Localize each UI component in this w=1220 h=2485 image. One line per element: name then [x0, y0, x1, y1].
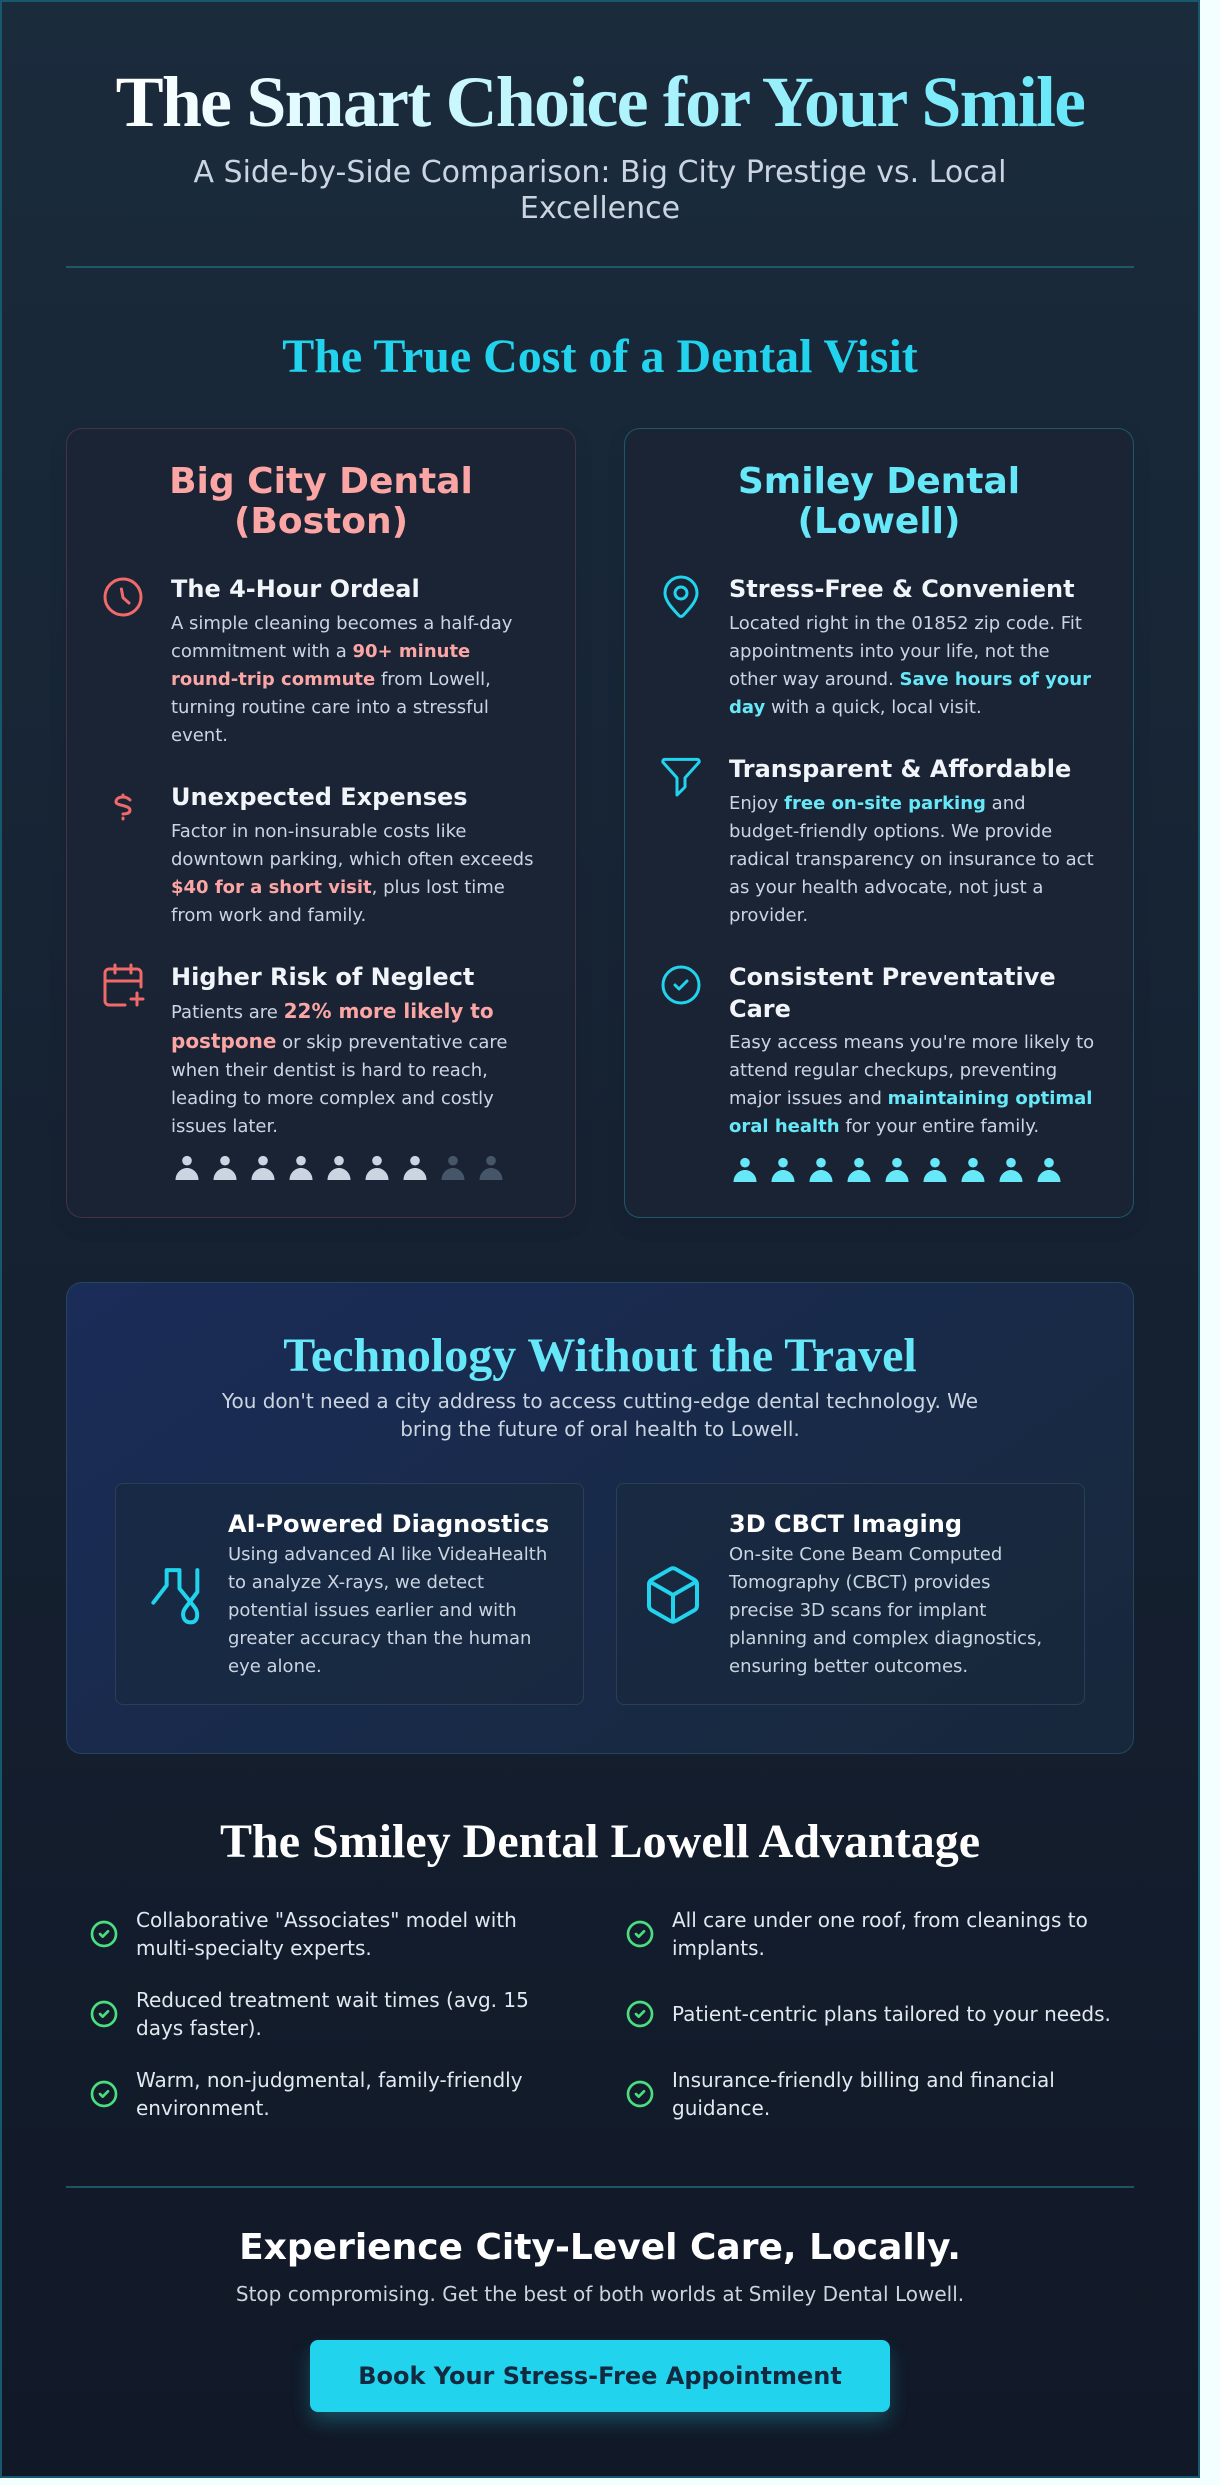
- advantage text 4: Patient-centric plans tailored to your needs.: [672, 2002, 1111, 2026]
- intro text: technology: [222, 1389, 978, 1441]
- advantage text 2: implants.: [672, 1936, 765, 1960]
- heading: advantage: The Smiley Dental Lowell Advantage: [220, 1815, 980, 1868]
- item text: ordeal: turning routine care into a stressful: [171, 697, 489, 718]
- item text: stress-free: other way around. Save hours of your: [729, 669, 1091, 690]
- panel heading: big city: (Boston): [234, 501, 408, 542]
- card text: 3d imaging: Tomography (CBCT) provides: [729, 1572, 990, 1593]
- heading: the true cost: The True Cost of a Dental Visit: [282, 330, 918, 383]
- item title: unexpected expenses: Unexpected Expenses: [171, 783, 468, 811]
- card text: 3d imaging: ensuring better outcomes.: [729, 1656, 968, 1677]
- subtitle: Excellence: [520, 191, 680, 226]
- advantage text 5: Warm, non-judgmental, family-friendly: [136, 2068, 523, 2092]
- item text: neglect: issues later.: [171, 1116, 278, 1137]
- panel: smiley dental: [624, 428, 1134, 1218]
- panel heading: big city: Big City Dental: [169, 461, 473, 502]
- card text: 3d imaging: On-site Cone Beam Computed: [729, 1544, 1002, 1565]
- item title: transparent: Transparent & Affordable: [729, 755, 1071, 783]
- item text: neglect: postpone or skip preventative care: [171, 1029, 507, 1053]
- card text: ai diagnostics: potential issues earlier and with: [228, 1600, 517, 1621]
- card text: ai diagnostics: greater accuracy than the human: [228, 1628, 531, 1649]
- panel: technology: [66, 1282, 1134, 1754]
- advantage text 1: multi-specialty experts.: [136, 1936, 372, 1960]
- card text: ai diagnostics: Using advanced AI like VideaHealth: [228, 1544, 547, 1565]
- advantage text 6: Insurance-friendly billing and financial: [672, 2068, 1055, 2092]
- panel: big city dental: [66, 428, 576, 1218]
- item text: transparent: as your health advocate, not just a: [729, 877, 1043, 898]
- card title: 3d imaging: 3D CBCT Imaging: [729, 1510, 962, 1538]
- cta button: [310, 2340, 890, 2412]
- icon: cube: [647, 1566, 699, 1624]
- item text: expenses: from work and family.: [171, 905, 366, 926]
- advantage text 5: [136, 2068, 523, 2120]
- card title: ai diagnostics: AI-Powered Diagnostics: [228, 1510, 549, 1538]
- cta button: Book Your Stress-Free Appointment: [358, 2362, 842, 2390]
- advantage text 5: environment.: [136, 2096, 270, 2120]
- icon: funnel: [661, 758, 701, 797]
- item title: consistent: Care: [729, 995, 791, 1023]
- card text: ai diagnostics: to analyze X-rays, we detect: [228, 1572, 484, 1593]
- advantage text 1: [136, 1908, 517, 1960]
- item text: transparent: [729, 793, 1094, 926]
- item text: ordeal: round-trip commute from Lowell,: [171, 669, 491, 690]
- advantage text 3: Reduced treatment wait times (avg. 15: [136, 1988, 529, 2012]
- item text: transparent: provider.: [729, 905, 808, 926]
- item text: consistent: major issues and maintaining optimal: [729, 1088, 1092, 1109]
- item title: the 4-hour ordeal: The 4-Hour Ordeal: [171, 575, 420, 603]
- item title: higher risk: Higher Risk of Neglect: [171, 963, 474, 991]
- item title: consistent: [729, 963, 1056, 1023]
- icon: clock: [104, 578, 142, 616]
- item text: neglect: when their dentist is hard to reach,: [171, 1060, 488, 1081]
- card: ai diagnostics: [115, 1483, 584, 1705]
- item text: expenses: Factor in non-insurable costs like: [171, 821, 466, 842]
- item text: neglect: leading to more complex and costly: [171, 1088, 494, 1109]
- panel heading: big city: [169, 461, 473, 542]
- item text: stress-free: appointments into your life, not the: [729, 641, 1050, 662]
- icon: ai stethoscope: [151, 1568, 200, 1624]
- item text: ordeal: commitment with a 90+ minute: [171, 641, 470, 662]
- advantage text 2: All care under one roof, from cleanings to: [672, 1908, 1088, 1932]
- item text: expenses: $40 for a short visit, plus lost time: [171, 877, 505, 898]
- item text: consistent: oral health for your entire family.: [729, 1116, 1039, 1137]
- icon: map pin: [664, 576, 698, 618]
- check icon 2: [626, 1920, 654, 1948]
- advantage text 2: [672, 1908, 1088, 1960]
- icon: check circle: [662, 966, 700, 1004]
- item text: expenses: [171, 821, 533, 926]
- check icon 4: [626, 2000, 654, 2028]
- item text: ordeal: event.: [171, 725, 228, 746]
- item text: consistent: Easy access means you're more likely to: [729, 1032, 1094, 1053]
- subtitle: A Side-by-Side Comparison: Big City Prestige vs. Local: [193, 155, 1007, 190]
- item text: transparent: Enjoy free on-site parking and: [729, 793, 1026, 814]
- card text: ai diagnostics: eye alone.: [228, 1656, 322, 1677]
- advantage text 6: [672, 2068, 1055, 2120]
- item text: stress-free: [729, 613, 1091, 718]
- item text: consistent: attend regular checkups, preventing: [729, 1060, 1057, 1081]
- item text: ordeal: A simple cleaning becomes a half-day: [171, 613, 512, 634]
- panel heading: smiley: [738, 461, 1020, 542]
- check icon 6: [626, 2080, 654, 2108]
- advantage text 6: guidance.: [672, 2096, 770, 2120]
- card text: 3d imaging: precise 3D scans for implant: [729, 1600, 986, 1621]
- cta heading: Experience City-Level Care, Locally.: [239, 2227, 961, 2268]
- item text: transparent: budget-friendly options. We provide: [729, 821, 1052, 842]
- item text: neglect: Patients are 22% more likely to: [171, 999, 494, 1023]
- advantage text 1: Collaborative "Associates" model with: [136, 1908, 517, 1932]
- card text: 3d imaging: planning and complex diagnostics,: [729, 1628, 1042, 1649]
- item text: stress-free: day with a quick, local visit.: [729, 697, 982, 718]
- heading: technology: Technology Without the Travel: [283, 1329, 917, 1382]
- advantage text 3: days faster).: [136, 2016, 262, 2040]
- icon: dollar: [114, 794, 132, 820]
- panel heading: smiley: Smiley Dental: [738, 461, 1020, 502]
- cta text: Stop compromising. Get the best of both worlds at Smiley Dental Lowell.: [236, 2282, 964, 2306]
- card text: ai diagnostics: [228, 1544, 547, 1677]
- item title: stress-free: Stress-Free & Convenient: [729, 575, 1075, 603]
- item text: stress-free: Located right in the 01852 zip code. Fit: [729, 613, 1082, 634]
- intro text: technology: You don't need a city address to access cutting-edge dental technology. We: [222, 1389, 978, 1413]
- pictogram: 7 of 9 people: [176, 1156, 502, 1180]
- subtitle: [193, 155, 1007, 226]
- check icon 1: [90, 1920, 118, 1948]
- item text: transparent: radical transparency on insurance to act: [729, 849, 1094, 870]
- item text: expenses: downtown parking, which often exceeds: [171, 849, 533, 870]
- pictogram: 9 of 9 people: [734, 1158, 1060, 1182]
- intro text: technology: bring the future of oral health to Lowell.: [400, 1417, 800, 1441]
- item title: consistent: Consistent Preventative: [729, 963, 1056, 991]
- panel heading: smiley: (Lowell): [798, 501, 960, 542]
- check icon 3: [90, 2000, 118, 2028]
- title: The Smart Choice for Your Smile: [116, 62, 1084, 142]
- card text: 3d imaging: [728, 1544, 1042, 1677]
- check icon 5: [90, 2080, 118, 2108]
- icon: calendar plus: [104, 964, 144, 1006]
- item text: ordeal: [171, 613, 512, 746]
- advantage text 3: [136, 1988, 529, 2040]
- item text: consistent: [729, 1032, 1094, 1137]
- item text: neglect: [171, 999, 507, 1137]
- card: 3d imaging: [616, 1483, 1085, 1705]
